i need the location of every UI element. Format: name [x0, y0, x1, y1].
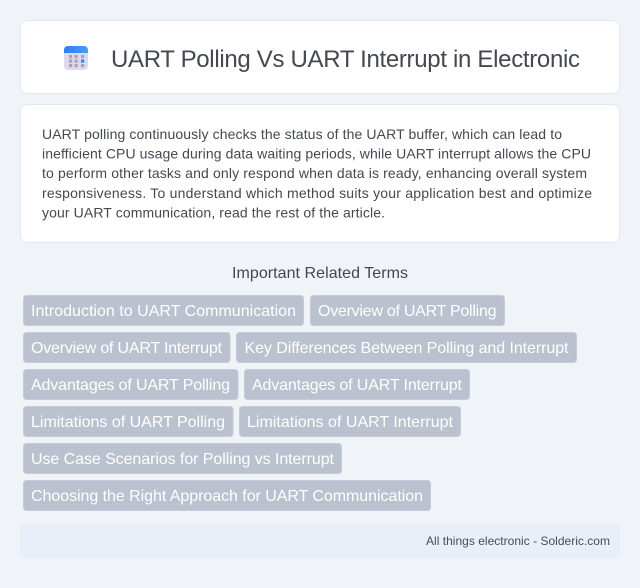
footer — [20, 524, 620, 558]
tag list: related terms — [24, 296, 576, 510]
tag: advantages of polling — [24, 370, 238, 400]
tag: overview of interrupt: Overview of UART Interrupt — [31, 340, 223, 357]
tag: use case scenarios: Use Case Scenarios for Polling vs Interrupt — [31, 451, 335, 468]
tag: overview of interrupt — [24, 332, 230, 362]
tag: key differences — [236, 332, 576, 362]
tag: limitations of interrupt — [240, 406, 460, 436]
heading: related terms: Important Related Terms — [232, 265, 408, 282]
tag: limitations of polling: Limitations of UART Polling — [31, 414, 225, 431]
tag: introduction — [24, 296, 304, 326]
panel: title card — [20, 20, 620, 94]
tag: overview of polling: Overview of UART Polling — [318, 303, 496, 320]
footer: All things electronic - Solderic.com — [426, 534, 610, 548]
tag: key differences: Key Differences Between Polling and Interrupt — [244, 340, 569, 357]
tag: advantages of interrupt: Advantages of UART Interrupt — [252, 377, 463, 394]
icon: calendar — [64, 46, 88, 70]
text block: summary: to perform other tasks and only respond when data is ready, enhancing overall system — [42, 165, 587, 181]
text block: summary: inefficient CPU usage during data waiting periods, while UART interrupt allows the CPU — [42, 146, 591, 162]
tag: choosing the right approach — [24, 480, 430, 510]
tag: use case scenarios — [24, 444, 342, 474]
tag: choosing the right approach: Choosing the Right Approach for UART Communication — [31, 488, 423, 505]
tag: limitations of polling — [24, 406, 233, 436]
tag: introduction: Introduction to UART Communication — [31, 303, 296, 320]
text block: summary: responsiveness. To understand which method suits your application best and optimize — [42, 185, 592, 201]
tag: advantages of interrupt — [244, 370, 470, 400]
title: UART Polling Vs UART Interrupt in Electronic — [111, 46, 580, 73]
tag: advantages of polling: Advantages of UART Polling — [31, 377, 230, 394]
text block: summary — [42, 126, 592, 220]
tag: limitations of interrupt: Limitations of UART Interrupt — [247, 414, 454, 431]
tag: overview of polling — [310, 296, 504, 326]
text block: summary: your UART communication, read the rest of the article. — [42, 204, 385, 220]
panel: summary text card — [20, 104, 620, 242]
text block: summary: UART polling continuously checks the status of the UART buffer, which can lead to — [42, 126, 562, 142]
